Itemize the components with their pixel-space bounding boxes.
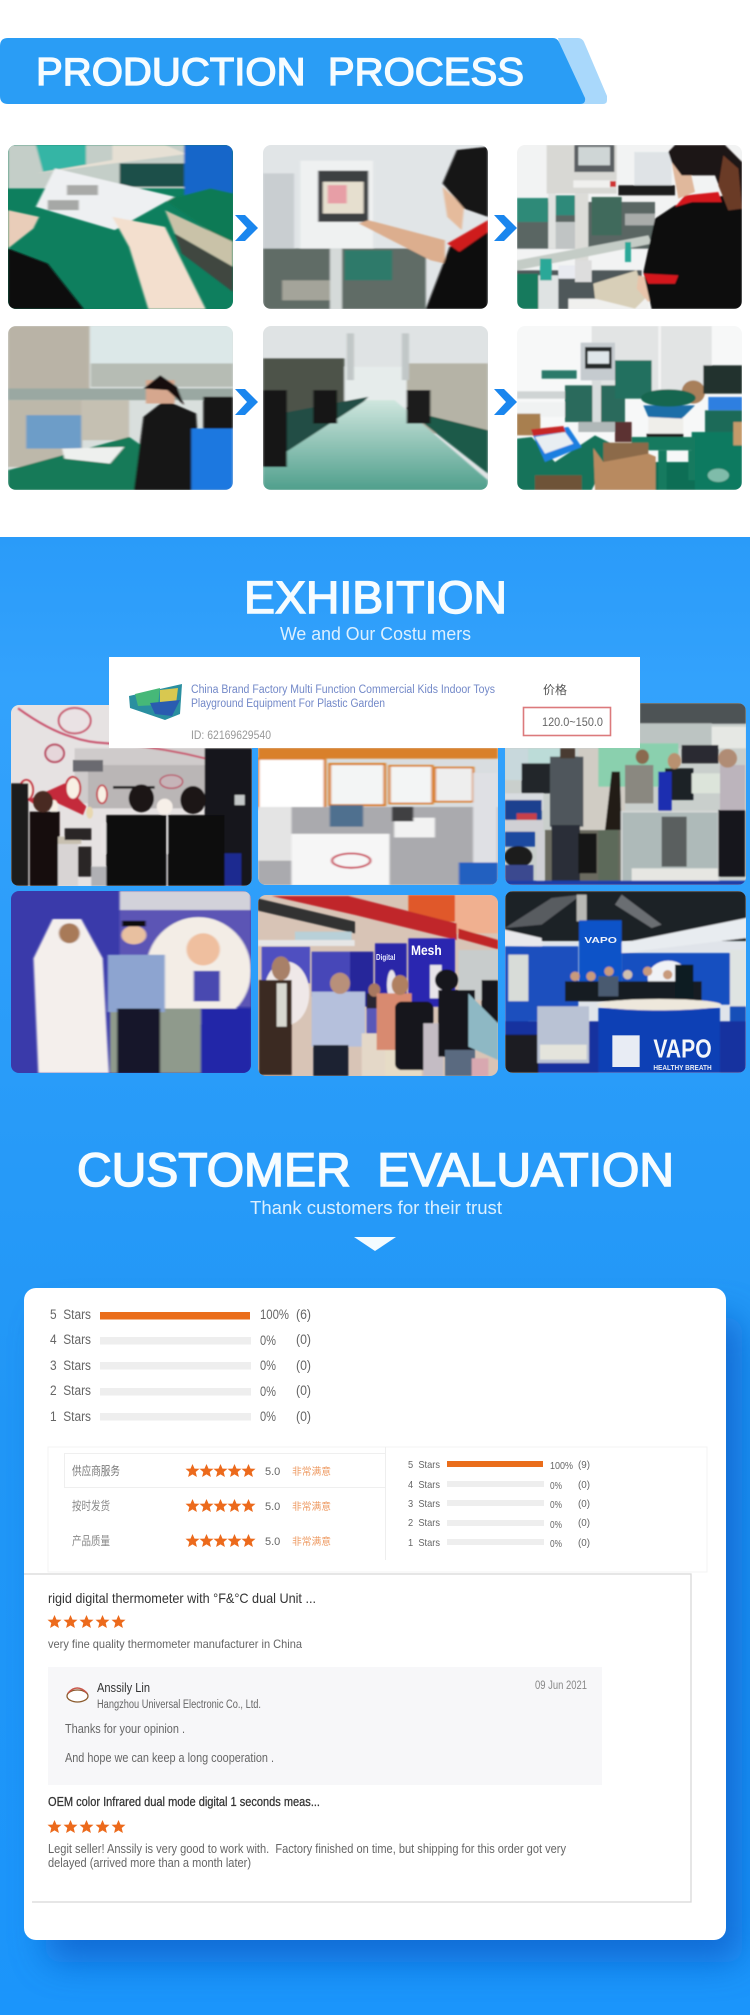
- product title: [191, 684, 495, 710]
- star ratings summary: right: 0%: [550, 1499, 562, 1511]
- star ratings summary: top: 5 Stars: [50, 1307, 91, 1322]
- photo: packing workstation: [8, 326, 233, 490]
- supplier ratings panel: [48, 1447, 707, 1572]
- photo: long conveyor hall: [263, 326, 488, 490]
- star ratings summary: right: [408, 1459, 590, 1550]
- star ratings summary: right: 1 Stars: [408, 1537, 440, 1549]
- price box: 120.0~150.0: [542, 715, 603, 729]
- heading: customer evaluation: CUSTOMER EVALUATION: [77, 1143, 674, 1196]
- supplier company: Hangzhou Universal Electronic Co., Ltd.: [97, 1699, 261, 1711]
- row: product quality: 非常满意: [292, 1535, 331, 1548]
- star ratings summary: right: 100%: [550, 1460, 573, 1472]
- reply text: Thanks for your opinion .: [65, 1722, 185, 1736]
- heading banner: production process: PRODUCTION PROCESS: [36, 51, 524, 94]
- photo: two men at purple stand: [11, 891, 251, 1073]
- star ratings summary: right: 4 Stars: [408, 1479, 440, 1491]
- arrow: [235, 215, 258, 241]
- star ratings summary: top: (0): [296, 1409, 311, 1424]
- photo: checking a printed sheet on the line: [8, 145, 233, 309]
- photo: VAPO stand with team: VAPO: [653, 1033, 712, 1063]
- review 2 text: Legit seller! Anssily is very good to work with. Factory finished on time, but shipping for this order got very: [48, 1842, 567, 1856]
- star ratings summary: top: 0%: [260, 1333, 276, 1348]
- star ratings summary: right: 2 Stars: [408, 1517, 440, 1529]
- row: product quality: 产品质量: [72, 1534, 110, 1548]
- star ratings summary: top: 1 Stars: [50, 1409, 91, 1424]
- photo: crowded stand with Mesh wall: Mesh: [411, 942, 442, 958]
- down arrow: [354, 1237, 396, 1251]
- photo: crowded stand with Mesh wall: Digital: [376, 952, 395, 962]
- star ratings summary: top: 100%: [260, 1307, 289, 1322]
- photo: VAPO stand with team: [505, 891, 746, 1073]
- photo: operator at touch screen: [263, 145, 488, 309]
- star ratings summary: right: 0%: [550, 1538, 562, 1550]
- photo: VAPO stand with team: HEALTHY BREATH: [653, 1063, 712, 1072]
- star ratings summary: right: 3 Stars: [408, 1498, 440, 1510]
- heading: exhibition: EXHIBITION: [244, 572, 507, 623]
- evaluation card: [24, 1288, 726, 1940]
- row: supplier service: [72, 1463, 331, 1478]
- supplier logo: [67, 1688, 88, 1702]
- star ratings summary: right: 0%: [550, 1519, 562, 1531]
- star ratings summary: top: [50, 1307, 311, 1424]
- photo: VAPO stand with team: VAPO: [584, 935, 617, 945]
- row: on-time shipping: 非常满意: [292, 1500, 331, 1513]
- review 2 text: [48, 1842, 567, 1870]
- row: product quality: 5.0: [265, 1536, 280, 1548]
- photo: booth with orange framed panels: [258, 748, 498, 885]
- photo: visitors at glass display: [504, 703, 746, 885]
- star ratings summary: top: (0): [296, 1358, 311, 1373]
- star ratings summary: top: (0): [296, 1332, 311, 1347]
- review 2 text: delayed (arrived more than a month later): [48, 1856, 251, 1870]
- price label: 价格: [543, 682, 567, 697]
- photo: white booth with red circles: [11, 705, 252, 886]
- star ratings summary: top: (6): [296, 1307, 311, 1322]
- star ratings summary: right: (0): [578, 1498, 590, 1510]
- product title: Playground Equipment For Plastic Garden: [191, 698, 385, 710]
- product title: China Brand Factory Multi Function Commercial Kids Indoor Toys: [191, 684, 495, 696]
- photo: crowded stand with Mesh wall: [258, 895, 498, 1076]
- supplier name: Anssily Lin: [97, 1680, 150, 1695]
- review 1 stars: [48, 1615, 126, 1628]
- supplier reply panel: [48, 1667, 602, 1785]
- arrow: [494, 389, 517, 415]
- row: on-time shipping: 按时发货: [72, 1498, 110, 1513]
- row: supplier service: 供应商服务: [72, 1463, 120, 1478]
- reply date: 09 Jun 2021: [535, 1680, 587, 1692]
- subheading: we and our customers: We and Our Costu mers: [280, 624, 471, 644]
- review 1 text: very fine quality thermometer manufacturer in China: [48, 1637, 302, 1651]
- star ratings summary: top: 0%: [260, 1358, 276, 1373]
- section background: production process: [0, 0, 750, 537]
- star ratings summary: right: 0%: [550, 1480, 562, 1492]
- heading banner: production process: [0, 38, 607, 104]
- star ratings summary: top: 0%: [260, 1384, 276, 1399]
- star ratings summary: top: (0): [296, 1383, 311, 1398]
- reply text: And hope we can keep a long cooperation .: [65, 1751, 274, 1765]
- arrow: [235, 389, 258, 415]
- star ratings summary: right: (9): [578, 1459, 590, 1471]
- star ratings summary: right: (0): [578, 1517, 590, 1529]
- subheading: thank customers: Thank customers for their trust: [250, 1198, 502, 1218]
- product thumbnail: [129, 684, 182, 720]
- review list frame: [24, 1574, 691, 1902]
- photo: vibratory bowl feeder machine: [517, 326, 742, 490]
- star ratings summary: right: 5 Stars: [408, 1459, 440, 1471]
- row: on-time shipping: [72, 1498, 331, 1513]
- reply text: [65, 1722, 274, 1765]
- photo: operator at assembly machine: [517, 145, 742, 309]
- star ratings summary: top: 0%: [260, 1409, 276, 1424]
- product id: ID: 62169629540: [191, 730, 271, 742]
- row: on-time shipping: 5.0: [265, 1501, 280, 1513]
- review 2 title: OEM color Infrared dual mode digital 1 seconds meas...: [48, 1795, 320, 1809]
- star ratings summary: right: (0): [578, 1537, 590, 1549]
- arrow: [494, 215, 517, 241]
- product card overlay: [109, 657, 640, 748]
- star ratings summary: right: (0): [578, 1479, 590, 1491]
- row: supplier service: 非常满意: [292, 1465, 331, 1478]
- star ratings summary: top: 4 Stars: [50, 1332, 91, 1347]
- price box: [524, 708, 610, 736]
- review 1 title: rigid digital thermometer with °F&°C dual Unit ...: [48, 1590, 316, 1606]
- star ratings summary: top: 3 Stars: [50, 1358, 91, 1373]
- row: supplier service: 5.0: [265, 1466, 280, 1478]
- star ratings summary: top: 2 Stars: [50, 1383, 91, 1398]
- evaluation card shadow: [46, 1318, 742, 1962]
- review 2 stars: [48, 1820, 126, 1833]
- row: product quality: [72, 1534, 331, 1548]
- section background: exhibition and evaluation: [0, 537, 750, 2015]
